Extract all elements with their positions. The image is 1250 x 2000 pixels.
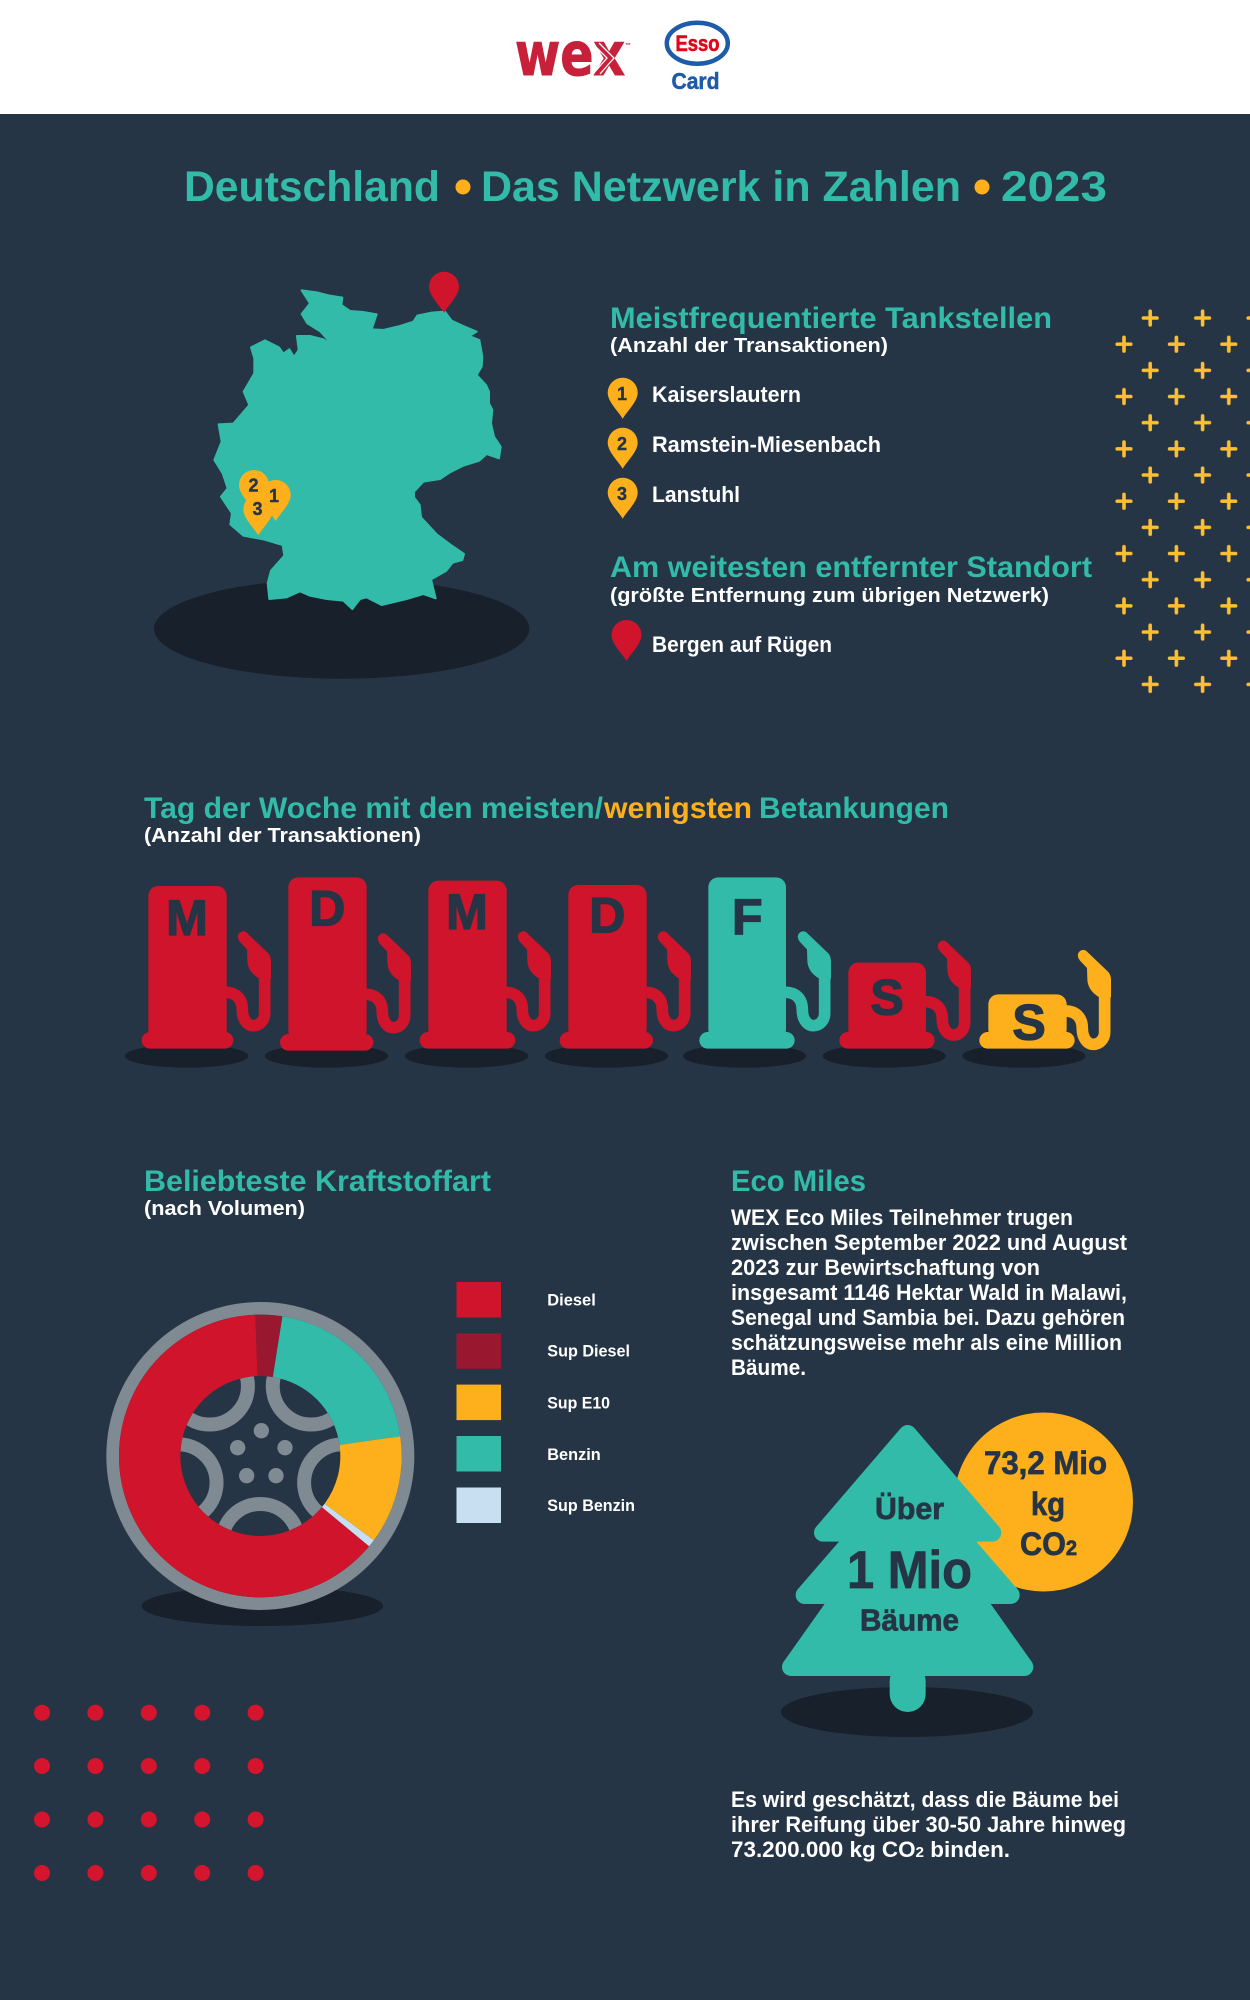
pump: Montag <box>125 886 271 1068</box>
heading: wenigsten <box>603 792 752 825</box>
legend <box>456 1282 635 1523</box>
pins 1 2 3 on map <box>239 470 291 535</box>
pump chart <box>125 877 1111 1068</box>
panel: day of week <box>125 792 1111 1068</box>
CO2 circle <box>954 1412 1133 1592</box>
pump: Donnerstag: D <box>589 888 625 944</box>
intro paragraph: schätzungsweise mehr als eine Million <box>731 1330 1122 1355</box>
subheading: (Anzahl der Transaktionen) <box>144 824 421 847</box>
pump: Freitag: F <box>732 889 763 945</box>
heading: Eco Miles <box>731 1165 866 1198</box>
logo: Esso Card <box>667 23 728 94</box>
CO2 circle: kg <box>1031 1486 1065 1522</box>
map of Germany with pins <box>154 272 529 679</box>
item 1 <box>608 378 801 419</box>
heading: Am weitesten entfernter Standort <box>610 551 1092 584</box>
intro paragraph: zwischen September 2022 und August <box>731 1230 1128 1255</box>
logo: WEX: ™ <box>625 42 631 49</box>
subheading: (nach Volumen) <box>144 1197 305 1220</box>
logo: Esso Card: Card <box>672 68 720 94</box>
legend: Sup Benzin <box>547 1497 635 1515</box>
tree text: 1 Mio <box>847 1541 972 1600</box>
pump: Samstag: S <box>870 969 904 1025</box>
item 2 <box>608 428 881 469</box>
panel: most remote location <box>610 551 1092 661</box>
heading: Betankungen <box>759 792 949 825</box>
Germany silhouette <box>214 290 501 609</box>
pump: Freitag <box>683 877 831 1068</box>
pins 1 2 3 on map: 1 <box>269 486 279 506</box>
location label: Bergen auf Rügen <box>652 632 832 657</box>
pump: Mittwoch: M <box>446 884 488 940</box>
red pin <box>612 620 642 661</box>
legend: Benzin <box>547 1446 601 1464</box>
logo: Esso Card: Esso <box>676 31 720 56</box>
panel: most frequented stations <box>608 302 1052 519</box>
subheading: (größte Entfernung zum übrigen Netzwerk) <box>610 584 1049 607</box>
closing paragraph <box>731 1787 1126 1862</box>
heading: Tag der Woche mit den meisten/ <box>144 792 604 825</box>
item 2: 2 <box>617 434 627 454</box>
title: Deutschland <box>184 163 440 211</box>
pump: Dienstag: D <box>309 881 345 937</box>
legend: Diesel <box>547 1292 596 1310</box>
title: Das Netzwerk in Zahlen <box>481 163 961 211</box>
title <box>184 163 1107 211</box>
tree text <box>847 1491 972 1638</box>
intro paragraph <box>731 1205 1128 1380</box>
pump: Mittwoch <box>405 881 551 1068</box>
item 3: Lanstuhl <box>652 482 740 507</box>
closing paragraph: Es wird geschätzt, dass die Bäume bei <box>731 1787 1119 1812</box>
pins 1 2 3 on map: 2 <box>248 476 259 496</box>
pump: Donnerstag <box>545 885 691 1068</box>
panel: Eco Miles <box>731 1165 1133 1862</box>
heading <box>144 792 949 825</box>
pins 1 2 3 on map: 3 <box>252 499 263 519</box>
closing paragraph: 73.200.000 kg CO2 binden. <box>731 1837 1010 1862</box>
item 3: 3 <box>617 484 627 504</box>
subheading: (Anzahl der Transaktionen) <box>610 334 888 357</box>
heading: Meistfrequentierte Tankstellen <box>610 302 1052 335</box>
legend: Sup E10 <box>547 1395 610 1413</box>
title: 2023 <box>1001 163 1107 211</box>
logo: WEX: wex <box>515 20 625 90</box>
item 1: 1 <box>617 384 627 404</box>
tree text: Bäume <box>860 1602 959 1638</box>
intro paragraph: Bäume. <box>731 1355 806 1380</box>
legend: Sup Diesel <box>547 1343 630 1361</box>
CO2 circle: CO2 <box>1020 1526 1077 1562</box>
intro paragraph: Senegal und Sambia bei. Dazu gehören <box>731 1305 1125 1330</box>
tree shadow <box>781 1687 1033 1737</box>
heading: Beliebteste Kraftstoffart <box>144 1165 491 1198</box>
donut chart tyre <box>113 1308 408 1626</box>
item 2: Ramstein-Miesenbach <box>652 432 881 457</box>
closing paragraph: ihrer Reifung über 30-50 Jahre hinweg <box>731 1812 1126 1837</box>
intro paragraph: insgesamt 1146 Hektar Wald in Malawi, <box>731 1280 1127 1305</box>
pump: Sonntag <box>962 950 1111 1068</box>
tree and CO2 graphic <box>781 1412 1133 1737</box>
header band with logos <box>0 0 1250 114</box>
pin: Bergen auf Rügen on map <box>429 272 459 313</box>
map shadow <box>154 579 529 679</box>
pump: Sonntag: S <box>1012 994 1046 1050</box>
CO2 circle: 73,2 Mio <box>984 1445 1107 1481</box>
panel: fuel type <box>113 1165 635 1626</box>
pump: Montag: M <box>166 890 208 946</box>
item 1: Kaiserslautern <box>652 382 801 407</box>
pump: Dienstag <box>265 877 411 1068</box>
tree text: Über <box>875 1491 944 1526</box>
item 3 <box>608 478 740 519</box>
pump: Samstag <box>823 941 971 1068</box>
intro paragraph: 2023 zur Bewirtschaftung von <box>731 1255 1040 1280</box>
intro paragraph: WEX Eco Miles Teilnehmer trugen <box>731 1205 1073 1230</box>
tree <box>791 1434 1024 1712</box>
